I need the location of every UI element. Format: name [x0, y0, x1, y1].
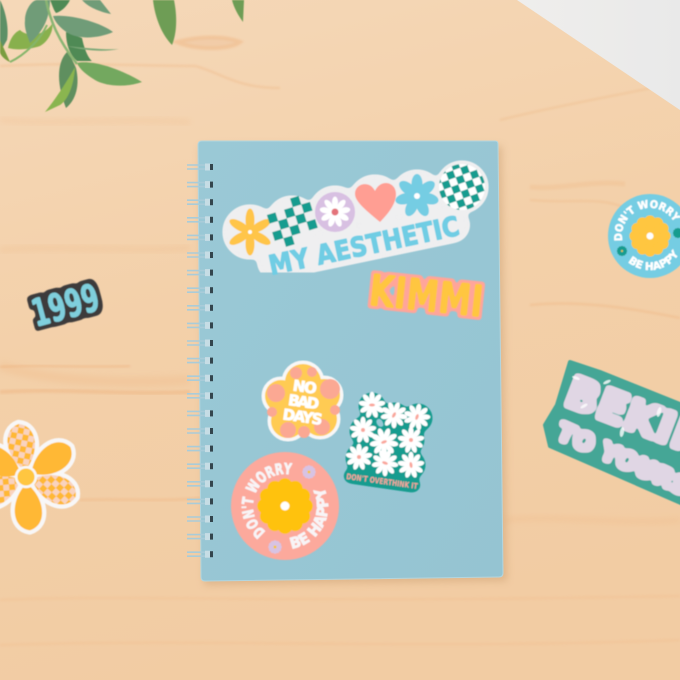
- sticker: no bad days: [265, 364, 340, 438]
- sticker text: BAD: [287, 391, 320, 413]
- icon: yellow flower: [227, 208, 273, 256]
- sticker: don't worry be happy pink: BE HAPPY: [289, 490, 330, 550]
- plant leaves: [0, 0, 244, 112]
- icon: heart: [355, 183, 396, 222]
- spiral binding: [187, 164, 213, 558]
- curved text: DON'T WORRY: [613, 199, 680, 242]
- sticker backing: [223, 161, 488, 262]
- sticker: be kind to yourself: [545, 362, 680, 522]
- sticker: don't worry be happy blue: BE HAPPY: [628, 248, 678, 271]
- letter highlights: [572, 375, 662, 437]
- icon: checkerboard: [264, 193, 320, 249]
- notebook: [187, 141, 503, 581]
- white paper corner: [517, 0, 680, 110]
- sticker text: NO: [292, 377, 318, 398]
- sticker: don't worry be happy blue: [607, 193, 680, 279]
- teal backing: [545, 362, 680, 507]
- small purple daisies: [268, 465, 316, 554]
- sticker: my aesthetic: [223, 161, 488, 282]
- sticker text: DAYS: [282, 405, 324, 429]
- flower shape: [265, 364, 340, 438]
- sticker: kimmi: KIMMI: [367, 265, 486, 328]
- curved text: DON'T WORRY: [240, 462, 293, 540]
- sticker text: MY AESTHETIC: [266, 211, 462, 282]
- teal backing: [346, 393, 432, 485]
- yellow flower: [257, 478, 313, 534]
- icon: disco ball: [439, 164, 485, 210]
- sticker: don't worry be happy pink: [230, 452, 340, 560]
- notebook shadow: [200, 146, 507, 585]
- pink pattern flowers: [267, 367, 340, 438]
- sticker: yellow checker flower: [0, 422, 81, 531]
- sticker: 1999: 1999: [27, 276, 104, 336]
- yellow flower: [629, 215, 671, 257]
- small teal daisies: [617, 228, 680, 256]
- icon: purple daisy: [315, 192, 355, 232]
- sticker text: DON'T OVERTHINK IT: [346, 472, 419, 491]
- icon: blue flower: [394, 174, 440, 218]
- notebook cover: [198, 141, 503, 581]
- sticker: don't overthink it: [345, 392, 434, 491]
- daisies: [345, 392, 434, 481]
